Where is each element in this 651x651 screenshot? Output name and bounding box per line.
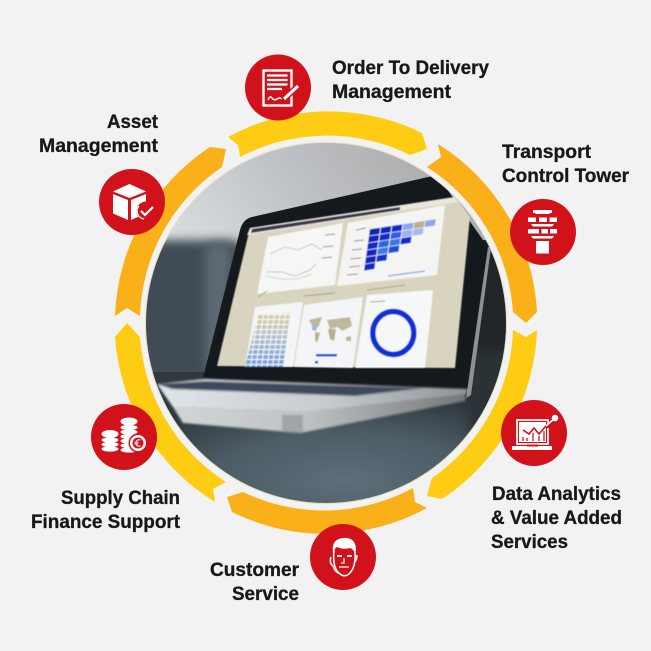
step: order to delivery management <box>245 54 489 120</box>
label: supply chain finance support <box>31 488 181 533</box>
laptop lid <box>203 175 488 397</box>
label: order to delivery management <box>332 58 489 103</box>
arrow segment: bottom <box>227 488 427 534</box>
icon: box with check <box>99 169 165 235</box>
laptop base <box>157 379 468 433</box>
label: order to delivery management: Management <box>332 82 452 103</box>
circular arrow ring <box>115 111 537 534</box>
icon: customer service agent face <box>310 524 376 590</box>
label: supply chain finance support: Supply Chain <box>61 488 180 509</box>
label: customer service <box>210 560 300 605</box>
dashboard panel: line chart <box>257 223 343 294</box>
laptop screen <box>217 197 470 368</box>
step: data analytics and value added services <box>491 400 622 553</box>
dashboard panel: heatmap <box>337 205 445 286</box>
label: customer service: Service <box>232 584 299 605</box>
arrow segment: top <box>228 111 427 157</box>
icon: signed document <box>245 54 311 120</box>
label: asset management <box>39 112 159 157</box>
step: asset management <box>39 112 165 235</box>
dashboard panel: world map <box>294 297 363 368</box>
label: data analytics and value added services <box>491 484 622 553</box>
label: data analytics and value added services: Services <box>491 532 568 553</box>
label: asset management: Management <box>39 136 159 157</box>
arrow segment: upper left <box>115 147 226 316</box>
label: supply chain finance support: Finance Support <box>31 512 181 533</box>
label: transport control tower: Transport <box>502 142 592 163</box>
label: data analytics and value added services: Data Analytics <box>492 484 621 505</box>
label: transport control tower: Control Tower <box>502 166 630 187</box>
central photo: laptop with dashboard <box>130 142 515 508</box>
label: asset management: Asset <box>107 112 159 133</box>
dashboard panel: grid table <box>245 302 303 367</box>
arrow segment: right <box>427 144 537 323</box>
step: customer service <box>210 524 376 605</box>
label: transport control tower <box>502 142 630 187</box>
label: order to delivery management: Order To Delivery <box>332 58 489 79</box>
dashboard panel: donut chart <box>355 290 433 368</box>
arrow segment: lower right <box>427 330 537 499</box>
label: customer service: Customer <box>210 560 300 581</box>
step: transport control tower <box>502 142 630 265</box>
icon: euro coin stacks <box>91 404 157 470</box>
label: data analytics and value added services: & Value Added <box>491 508 622 529</box>
icon: control tower <box>510 199 576 265</box>
step: supply chain finance support <box>31 404 181 533</box>
arrow segment: lower left <box>115 323 226 502</box>
icon: analytics monitor <box>501 400 567 466</box>
